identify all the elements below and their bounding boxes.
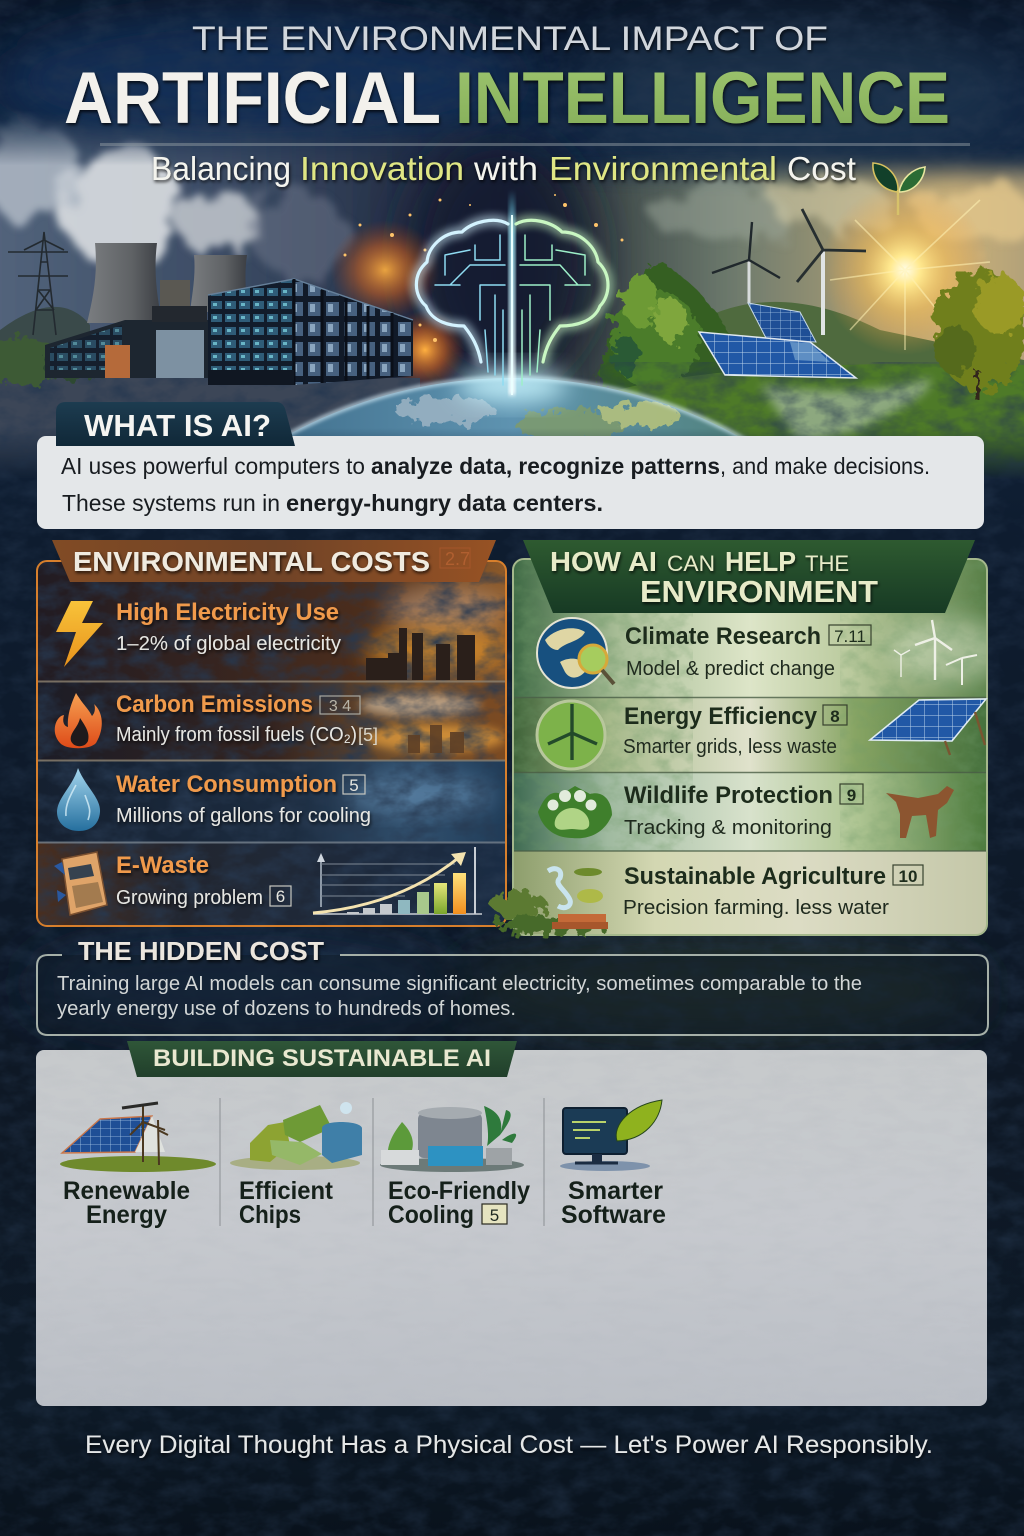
footer tagline: Every Digital Thought Has a Physical Cost — Let's Power AI Responsibly.	[85, 1431, 933, 1459]
icon: sprout	[873, 163, 925, 215]
intro text box: analyze data, recognize patterns	[371, 453, 720, 479]
hidden cost box	[37, 955, 988, 1035]
item: smarter software: Software	[561, 1201, 666, 1229]
data centre building	[208, 279, 413, 385]
item: carbon emissions: 3 4	[329, 698, 351, 715]
item: eco-friendly cooling	[380, 1106, 530, 1229]
item: climate research: Climate Research	[625, 623, 821, 650]
sky right	[512, 172, 1024, 400]
item: wildlife protection: Wildlife Protection	[624, 782, 833, 809]
title line 1: THE ENVIRONMENTAL IMPACT OF	[192, 20, 828, 58]
e-waste growth chart	[313, 847, 482, 914]
intro text box: energy-hungry data centers.	[286, 490, 603, 516]
panel: what is AI	[37, 402, 984, 529]
item: carbon emissions: Carbon Emissions	[116, 691, 313, 718]
item: water consumption	[57, 768, 371, 831]
intro text box: AI uses powerful computers to	[61, 453, 365, 479]
item: e-waste	[54, 852, 291, 915]
trees right	[934, 270, 1024, 400]
solar panels	[699, 303, 856, 378]
small turbines	[894, 620, 977, 685]
title: intelligence: INTELLIGENCE	[455, 58, 950, 139]
item: water consumption: Millions of gallons for cooling	[116, 805, 371, 827]
item: efficient chips	[230, 1102, 362, 1229]
item: sustainable agriculture: Precision farming. less water	[623, 897, 889, 919]
item: sustainable agriculture: Sustainable Agriculture	[624, 863, 886, 890]
icon: flame	[55, 693, 102, 748]
item: renewable energy	[60, 1103, 216, 1229]
title rule	[100, 143, 970, 146]
hidden cost text: yearly energy use of dozens to hundreds of homes.	[57, 998, 516, 1020]
distant hills	[0, 302, 1024, 400]
item: wildlife protection: Tracking & monitoring	[624, 817, 832, 839]
item: water consumption: Water Consumption	[116, 771, 337, 798]
item: energy efficiency: Smarter grids, less waste	[623, 736, 837, 758]
sky left	[0, 124, 449, 386]
subtitle: Environmental	[549, 150, 777, 187]
item: efficient chips: Chips	[239, 1201, 301, 1229]
item: sustainable agriculture: 10	[899, 867, 917, 886]
help heading tab: HELP	[725, 546, 796, 577]
item: eco-friendly cooling: Eco-Friendly	[388, 1177, 530, 1205]
item: carbon emissions	[55, 691, 378, 748]
item: high electricity use: 1–2% of global electricity	[116, 633, 341, 655]
item: sustainable agriculture	[492, 863, 923, 934]
environmental costs heading tab	[52, 540, 496, 582]
earth globe	[290, 374, 748, 436]
item: carbon emissions: Mainly from fossil fuels (CO₂)	[116, 724, 357, 746]
icon: water drop	[57, 768, 100, 831]
icon: solar panel and turbine	[60, 1103, 216, 1172]
help heading tab: ENVIRONMENT	[640, 574, 878, 609]
icon: wind turbine disc	[537, 701, 605, 769]
subtitle	[151, 150, 856, 187]
green foliage	[593, 262, 729, 390]
item: energy efficiency	[537, 699, 986, 769]
cooling towers	[87, 243, 248, 323]
subtitle: with	[473, 150, 538, 187]
item: climate research	[537, 618, 977, 688]
icon: e-waste device	[54, 852, 107, 915]
sun glare	[827, 195, 990, 351]
item: climate research: Model & predict change	[626, 658, 835, 680]
what is AI heading tab: WHAT IS AI?	[84, 408, 271, 443]
building heading tab: BUILDING SUSTAINABLE AI	[153, 1045, 491, 1072]
fiery glow and sparks	[305, 194, 624, 398]
icon: cooling unit with plants	[380, 1106, 524, 1172]
item: smarter software	[560, 1100, 666, 1229]
power plant low building	[45, 306, 208, 378]
item: smarter software: Smarter	[568, 1177, 663, 1205]
intro text box: , and make decisions.	[720, 453, 930, 479]
item: high electricity use	[56, 599, 341, 667]
ground left	[0, 336, 420, 478]
panel outline	[37, 561, 506, 926]
item: e-waste: E-Waste	[116, 852, 209, 879]
icon: monitor with leaf	[560, 1100, 662, 1171]
subtitle: Balancing	[151, 150, 291, 187]
animal silhouette	[886, 786, 954, 838]
panel: building sustainable AI	[36, 1041, 987, 1406]
icon: faucet and plant	[548, 868, 608, 929]
electricity pylon	[8, 232, 68, 335]
icon: lightning bolt	[56, 601, 103, 667]
item: water consumption: 5	[349, 776, 359, 795]
item: climate research: 7.11	[834, 627, 866, 646]
icon: globe and magnifier	[537, 618, 614, 688]
building heading tab	[127, 1041, 517, 1077]
item: renewable energy: Energy	[86, 1201, 167, 1229]
help heading tab: THE	[805, 551, 849, 576]
parchment background	[36, 1050, 987, 1406]
item: wildlife protection	[538, 782, 954, 839]
panel: environmental costs	[37, 540, 506, 927]
help heading tab	[523, 540, 975, 613]
help heading tab: CAN	[667, 551, 715, 576]
subtitle: Cost	[787, 150, 856, 187]
item: carbon emissions: [5]	[358, 725, 378, 745]
title block	[64, 20, 950, 139]
solar panel	[870, 699, 986, 755]
light beam	[457, 190, 567, 403]
icon: paw with leaves	[538, 786, 612, 838]
item: eco-friendly cooling: 5	[490, 1206, 499, 1225]
subtitle: Innovation	[300, 150, 464, 187]
intro text box	[37, 436, 984, 529]
hidden cost heading: THE HIDDEN COST	[78, 936, 324, 966]
panel outline	[513, 559, 987, 935]
ground right with stream	[600, 362, 1024, 480]
title: artificial: ARTIFICIAL	[64, 58, 441, 139]
intro text box: These systems run in	[62, 490, 280, 516]
panel: how AI can help the environment	[492, 540, 1010, 936]
dark centre sky	[405, 130, 595, 390]
hidden cost text: Training large AI models can consume significant electricity, sometimes comparable to the	[57, 973, 862, 995]
item: energy efficiency: 8	[830, 707, 840, 726]
hidden cost text	[57, 973, 862, 1020]
foliage spilling from the card	[492, 892, 605, 934]
icon: green chips	[230, 1102, 362, 1170]
glowing circuit brain	[416, 220, 608, 385]
help rows background	[513, 559, 1010, 936]
panel: the hidden cost	[37, 936, 988, 1035]
item: efficient chips: Efficient	[239, 1177, 334, 1205]
environmental costs heading tab: 2.7	[445, 549, 470, 569]
cost rows background	[37, 561, 506, 927]
item: renewable energy: Renewable	[63, 1177, 190, 1205]
smoke clouds	[0, 115, 1024, 277]
item: e-waste: 6	[276, 887, 285, 906]
environmental costs heading tab: ENVIRONMENTAL COSTS	[73, 546, 430, 577]
item: high electricity use: High Electricity Use	[116, 599, 339, 626]
item: energy efficiency: Energy Efficiency	[624, 703, 818, 730]
help heading tab: HOW AI	[550, 546, 657, 577]
item: eco-friendly cooling: Cooling	[388, 1201, 474, 1229]
hero illustration: polluting data centre to green energy	[0, 114, 1024, 474]
wind turbines	[712, 209, 866, 335]
item: wildlife protection: 9	[847, 786, 856, 805]
item: e-waste: Growing problem	[116, 887, 263, 909]
what is AI heading tab	[56, 402, 295, 446]
